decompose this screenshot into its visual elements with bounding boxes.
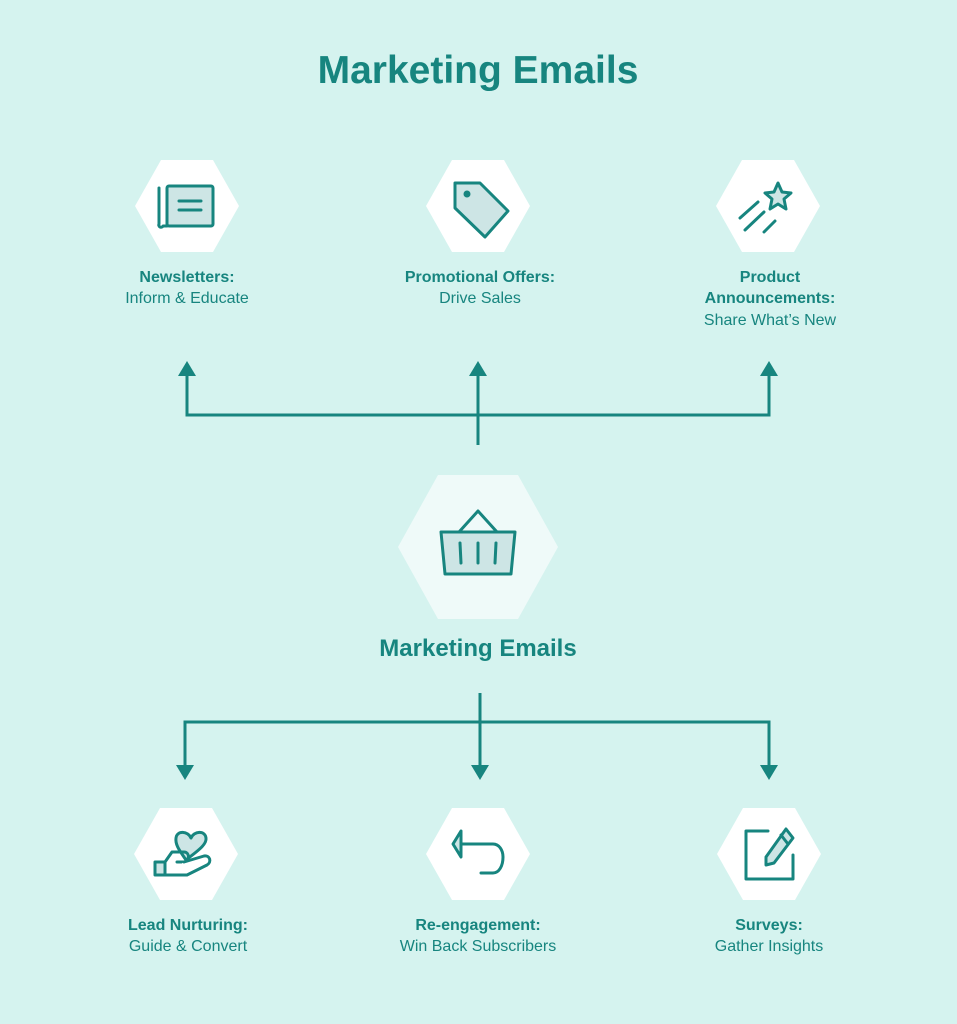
icon: return arrow [453, 831, 503, 873]
panel: lead nurturing: Guide & Convert [129, 938, 248, 955]
panel: central hub [379, 475, 577, 662]
label: lead nurturing: Lead Nurturing: [128, 917, 248, 934]
panel: re-engagement: Win Back Subscribers [400, 938, 556, 955]
panel: newsletters: Inform & Educate [125, 290, 249, 307]
panel: re-engagement [400, 808, 556, 955]
icon: edit [746, 829, 793, 879]
label: newsletters: Newsletters: [139, 269, 235, 286]
icon: basket [441, 511, 515, 574]
panel: product announcements: Announcements: [705, 290, 835, 307]
panel: product announcements: Share What’s New [704, 312, 837, 329]
title: Marketing Emails [318, 49, 638, 92]
icon: shooting star [740, 183, 791, 232]
panel: lead nurturing [128, 808, 248, 955]
icon: newspaper [159, 186, 213, 227]
panel: newsletters [125, 160, 249, 307]
label: re-engagement: Re-engagement: [415, 917, 541, 934]
label: surveys: Surveys: [735, 917, 803, 934]
label: product announcements: Product [740, 269, 801, 286]
arrows: top branch [178, 361, 778, 445]
panel: promotional offers: Drive Sales [439, 290, 521, 307]
panel: surveys [715, 808, 823, 955]
panel: promotional offers [405, 160, 555, 307]
panel: product announcements [704, 160, 837, 329]
icon: heart in hand [155, 832, 210, 875]
icon: tag [455, 183, 508, 237]
panel: surveys: Gather Insights [715, 938, 823, 955]
heading: central: Marketing Emails [379, 635, 577, 662]
arrows: bottom branch [176, 693, 778, 780]
label: promotional offers: Promotional Offers: [405, 269, 555, 286]
